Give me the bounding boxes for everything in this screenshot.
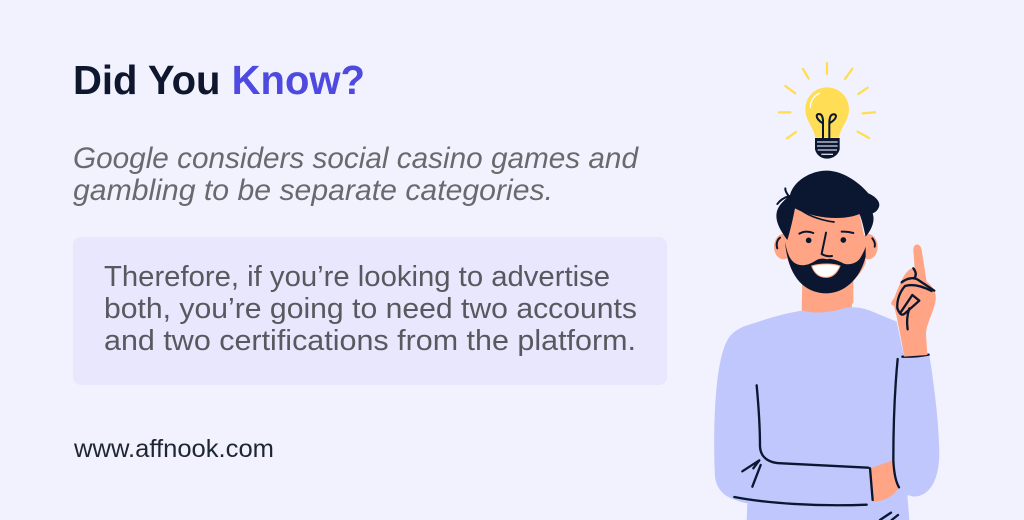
icon: light bulb bbox=[779, 63, 875, 159]
eyes bbox=[806, 237, 811, 243]
neck top bbox=[802, 280, 853, 303]
face bbox=[785, 207, 866, 290]
facial lines bbox=[777, 188, 875, 256]
sweater bbox=[714, 307, 939, 520]
body bbox=[714, 280, 939, 520]
ears bbox=[774, 234, 793, 259]
sweater lines bbox=[734, 355, 929, 520]
neck bbox=[802, 280, 853, 314]
callout text: both, you’re going to need two accounts bbox=[104, 293, 637, 325]
website url: www.affnook.com bbox=[73, 435, 274, 463]
hair bbox=[776, 171, 879, 240]
callout text: Therefore, if you’re looking to advertise bbox=[104, 261, 610, 293]
title: Did You Know? bbox=[73, 57, 365, 103]
raised hand bbox=[891, 244, 936, 357]
callout text: and two certifications from the platform. bbox=[104, 325, 636, 357]
forehead hair line bbox=[798, 208, 834, 222]
mouth bbox=[812, 264, 840, 277]
intro text: gambling to be separate categories. bbox=[73, 174, 553, 207]
callout text bbox=[104, 261, 637, 357]
illustration: man pointing up bbox=[714, 171, 939, 520]
beard bbox=[785, 242, 866, 293]
head bbox=[774, 171, 879, 303]
panel: callout bbox=[73, 237, 667, 385]
intro text bbox=[73, 142, 639, 207]
intro text: Google considers social casino games and bbox=[73, 142, 639, 175]
lower hand bbox=[870, 460, 899, 502]
